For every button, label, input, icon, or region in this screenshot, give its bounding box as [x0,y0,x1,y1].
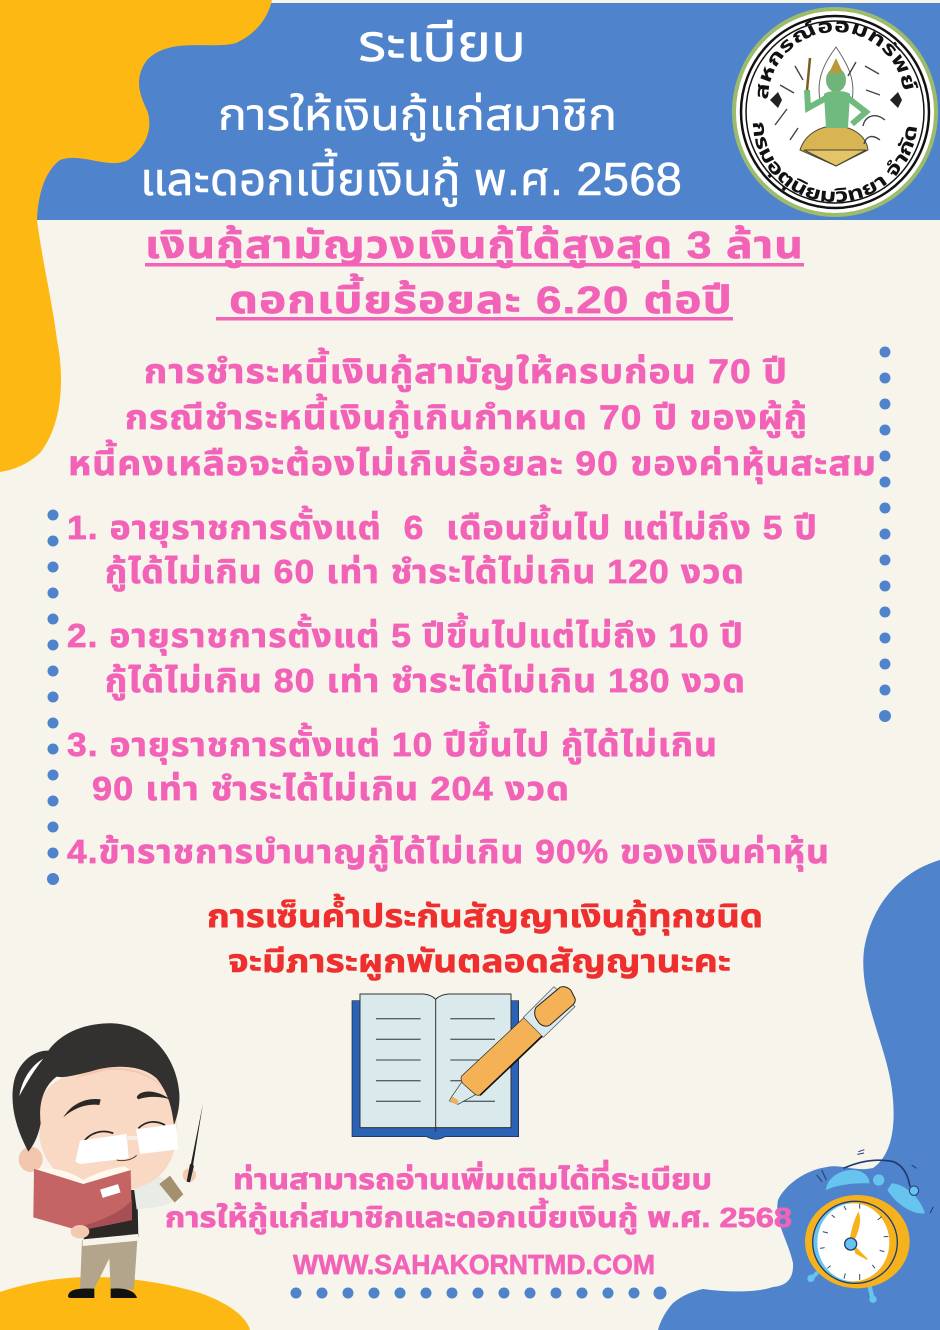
glasses [75,1124,178,1164]
heading: ordinary loan limit and interest: เงินกู้สามัญวงเงินกู้ได้สูงสุด 3 ล้าน [145,225,804,268]
hand [183,1168,196,1182]
dotted line right [879,346,891,722]
list item 3 [67,721,718,807]
text block: repayment conditions: กรณีชำระหนี้เงินกู้เกินกำหนด 70 ปี ของผู้กู้ [125,393,808,438]
heading: ordinary loan limit and interest [145,225,804,322]
text block: repayment conditions: หนี้คงเหลือจะต้องไม่เกินร้อยละ 90 ของค่าหุ้นสะสม [68,439,877,484]
icon: alarm clock [805,1150,933,1303]
lower hand [71,1225,89,1238]
callout: guarantor warning: จะมีภาระผูกพันตลอดสัญญานะคะ [228,943,731,980]
list item 4: 4.ข้าราชการบำนาญกู้ได้ไม่เกิน 90% ของเงินค่าหุ้น [67,833,830,872]
pointer [191,1103,203,1166]
torso [83,1190,138,1243]
text block: repayment conditions [68,347,877,484]
blue blob bottom right [658,860,940,1330]
title: และดอกเบี้ยเงินกู้ พ.ศ. 2568 [140,148,682,207]
icon: open book and highlighter [352,987,575,1139]
teacher character [12,1023,203,1298]
book [33,1169,132,1228]
dotted line left [47,510,59,885]
list item 3: 90 เท่า ชำระได้ไม่เกิน 204 งวด [92,770,570,807]
smile [117,1155,137,1161]
yellow blob top left [0,0,272,472]
list item 1: กู้ได้ไม่เกิน 60 เท่า ชำระได้ไม่เกิน 120 งวด [105,553,745,592]
logo: cooperative seal: สหกรณ์ออมทรัพย์ [758,20,918,99]
footer text: ท่านสามารถอ่านเพิ่มเติมได้ที่ระเบียบ [233,1159,712,1195]
face [39,1066,177,1192]
list item 1: 1. อายุราชการตั้งแต่ 6 เดือนขึ้นไป แต่ไม่ถึง 5 ปี [67,504,818,548]
list item 1 [67,504,818,592]
hair highlight [19,1059,43,1096]
header band [0,3,940,220]
sleeve [133,1177,182,1209]
title: การให้เงินกู้แก่สมาชิก [218,91,617,142]
callout: guarantor warning: การเซ็นค้ำประกันสัญญาเงินกู้ทุกชนิด [207,893,763,935]
list item 3: 3. อายุราชการตั้งแต่ 10 ปีขึ้นไป กู้ได้ไม่เกิน [67,721,718,765]
text block: repayment conditions: การชำระหนี้เงินกู้สามัญให้ครบก่อน 70 ปี [144,347,788,392]
title: ระเบียบ [358,15,526,73]
yellow mound bottom left [0,1277,250,1330]
logo: cooperative seal [732,7,938,217]
dotted line bottom [290,1286,666,1300]
eyebrows [63,1092,170,1117]
list item 2 [67,612,746,701]
footer text: การให้กู้แก่สมาชิกและดอกเบี้ยเงินกู้ พ.ศ. 2568 [165,1197,792,1235]
ear [19,1147,43,1172]
list item 2: กู้ได้ไม่เกิน 80 เท่า ชำระได้ไม่เกิน 180 งวด [105,662,746,701]
belt [83,1234,138,1246]
heading: ordinary loan limit and interest: ดอกเบี้ยร้อยละ 6.20 ต่อปี [229,273,733,322]
footer text: WWW.SAHAKORNTMD.COM [293,1249,655,1280]
logo: cooperative seal: กรมอุตุนิยมวิทยา จำกัด [752,122,917,202]
legs [80,1240,137,1289]
shoes [68,1288,137,1298]
eyes [83,1122,165,1143]
callout: guarantor warning [207,893,763,980]
title [140,15,682,207]
hair [12,1023,179,1152]
list item 2: 2. อายุราชการตั้งแต่ 5 ปีขึ้นไปแต่ไม่ถึง 10 ปี [67,612,744,656]
footer text [165,1159,792,1280]
